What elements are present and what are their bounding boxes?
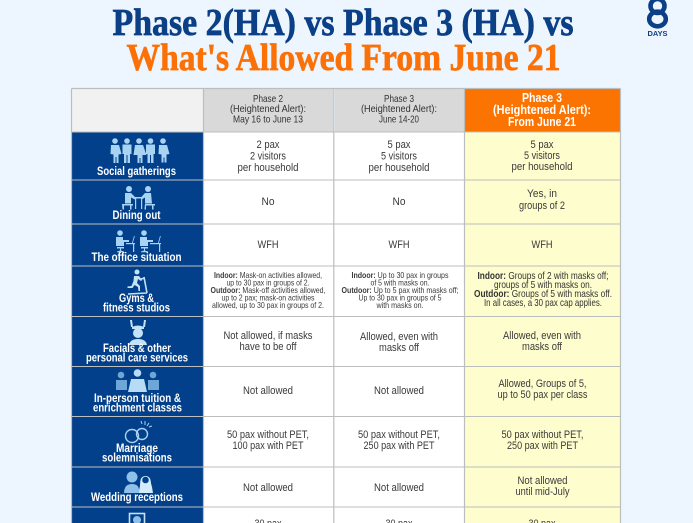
row: gyms and fitness studios: allowed, up to 30 pax in groups of 2. [212, 300, 324, 310]
icon: two office workers at desks [116, 230, 161, 252]
row: facials and personal care services: masks off [379, 342, 420, 354]
row: the office situation: WFH [388, 239, 410, 251]
row: partially cropped final row [130, 514, 556, 523]
row: gyms and fitness studios: Indoor: Mask-on activities allowed, [214, 270, 322, 280]
table header row: Phase 3 [522, 91, 562, 105]
row: facials and personal care services: personal care services [86, 350, 188, 364]
row: wedding receptions [91, 472, 570, 504]
row: gyms and fitness studios: Indoor: Up to 30 pax in groups [352, 270, 448, 280]
row: social gatherings: per household [512, 161, 572, 173]
row: dining out: groups of 2 [519, 200, 565, 212]
row: wedding receptions: until mid-July [516, 486, 570, 498]
row: the office situation: The office situation [92, 250, 182, 264]
icon: face with towel and hands [129, 320, 147, 345]
row: marriage solemnisations: 100 pax with PET [232, 440, 304, 452]
row: gyms and fitness studios: up to 2 pax; mask-on activities [222, 292, 314, 302]
table header row: Phase 3 [384, 94, 414, 105]
row: wedding receptions: Not allowed [518, 475, 568, 487]
row: marriage solemnisations: 50 pax without PET, [358, 429, 440, 441]
row: in-person tuition and enrichment classes: In-person tuition & [94, 391, 181, 405]
row: marriage solemnisations: Marriage [116, 441, 158, 455]
row: facials and personal care services: Allowed, even with [503, 330, 581, 342]
row: gyms and fitness studios: In all cases, a 30 pax cap applies. [484, 298, 602, 309]
row: in-person tuition and enrichment classes: enrichment classes [93, 400, 182, 414]
row: social gatherings: 2 visitors [250, 150, 286, 162]
row: facials and personal care services: masks off [522, 341, 563, 353]
icon: five people [110, 138, 170, 163]
title: Phase 2(HA) vs Phase 3 (HA) vs [112, 2, 574, 44]
row: gyms and fitness studios: Outdoor: Up to 5 pax with masks off; [342, 285, 458, 295]
row: social gatherings: 5 visitors [524, 150, 560, 162]
row: in-person tuition and enrichment classes: Not allowed [243, 385, 293, 397]
row: wedding receptions: Not allowed [243, 482, 293, 494]
row: facials and personal care services: Not allowed, if masks [224, 330, 313, 342]
row: dining out: No [262, 196, 274, 208]
table header row: (Heightened Alert): [230, 104, 306, 115]
logo: 8 Days [648, 0, 668, 38]
row: social gatherings: 5 visitors [381, 150, 417, 162]
icon: bride and groom [124, 472, 153, 493]
row: the office situation: WFH [532, 239, 552, 251]
row: gyms and fitness studios: groups of 5 with masks on. [494, 280, 592, 291]
row: gyms and fitness studios: of 5 with masks on. [370, 278, 430, 288]
table body backgrounds [72, 132, 620, 523]
table header row: June 14-20 [379, 114, 419, 126]
table header row: May 16 to June 13 [233, 114, 303, 126]
row: in-person tuition and enrichment classes [93, 369, 588, 414]
row: the office situation: WFH [258, 239, 278, 251]
row: marriage solemnisations: 50 pax without PET, [502, 429, 584, 441]
row: dining out: Dining out [112, 208, 160, 222]
row: gyms and fitness studios: Gyms & [119, 291, 154, 305]
row: gyms and fitness studios: Outdoor: Groups of 5 with masks off. [474, 289, 612, 300]
table header row: From June 21 [508, 115, 576, 129]
row: in-person tuition and enrichment classes: Allowed, Groups of 5, [498, 378, 586, 390]
row: dining out: No [392, 196, 406, 208]
row: gyms and fitness studios: with masks on. [376, 300, 424, 310]
row: marriage solemnisations: 250 pax with PET [364, 440, 435, 452]
row: social gatherings: 5 pax [388, 139, 411, 151]
icon: framed portrait [130, 514, 144, 523]
comparison table [71, 88, 621, 523]
icon: two diners at a table [122, 186, 155, 210]
row: marriage solemnisations: solemnisations [102, 450, 172, 464]
title [112, 2, 574, 79]
table header row: (Heightened Alert): [493, 103, 591, 117]
row: gyms and fitness studios [103, 270, 612, 314]
row: gyms and fitness studios: Indoor: Groups of 2 with masks off; [478, 271, 608, 282]
row: social gatherings: Social gatherings [97, 164, 176, 178]
table grid lines [71, 88, 621, 523]
logo: 8 Days: DAYS [648, 31, 668, 38]
row: social gatherings [97, 138, 572, 178]
row: social gatherings: 5 pax [530, 139, 554, 151]
row: wedding receptions: Wedding receptions [91, 490, 183, 504]
row: marriage solemnisations [102, 421, 584, 464]
row: facials and personal care services: Facials & other [103, 341, 171, 355]
icon: three readers with books [116, 369, 159, 392]
row: facials and personal care services [86, 320, 581, 364]
row: marriage solemnisations: 250 pax with PET [507, 440, 578, 452]
row: facials and personal care services: have to be off [240, 341, 297, 353]
table header row [72, 89, 620, 132]
row: dining out: Yes, in [527, 188, 557, 200]
row: social gatherings: per household [368, 162, 430, 174]
row: gyms and fitness studios: fitness studios [103, 300, 170, 314]
row: wedding receptions: Not allowed [374, 482, 424, 494]
row: in-person tuition and enrichment classes: up to 50 pax per class [498, 389, 588, 401]
table header row: Phase 2 [253, 94, 283, 105]
row: gyms and fitness studios: Up to 30 pax in groups of 5 [358, 292, 442, 302]
title: What's Allowed From June 21 [126, 37, 560, 79]
row: social gatherings: 2 pax [256, 139, 280, 151]
row: social gatherings: per household [238, 162, 298, 174]
row: gyms and fitness studios: up to 30 pax in groups of 2. [226, 278, 310, 288]
icon: person on a treadmill [128, 270, 147, 294]
icon: wedding rings [126, 421, 152, 442]
row: in-person tuition and enrichment classes: Not allowed [374, 385, 424, 397]
row: marriage solemnisations: 50 pax without PET, [227, 429, 309, 441]
row: the office situation [92, 230, 552, 264]
table header row: (Heightened Alert): [361, 104, 437, 115]
row: facials and personal care services: Allowed, even with [360, 331, 438, 343]
row: dining out [112, 186, 565, 222]
row: gyms and fitness studios: Outdoor: Mask-off activities allowed, [210, 285, 326, 295]
